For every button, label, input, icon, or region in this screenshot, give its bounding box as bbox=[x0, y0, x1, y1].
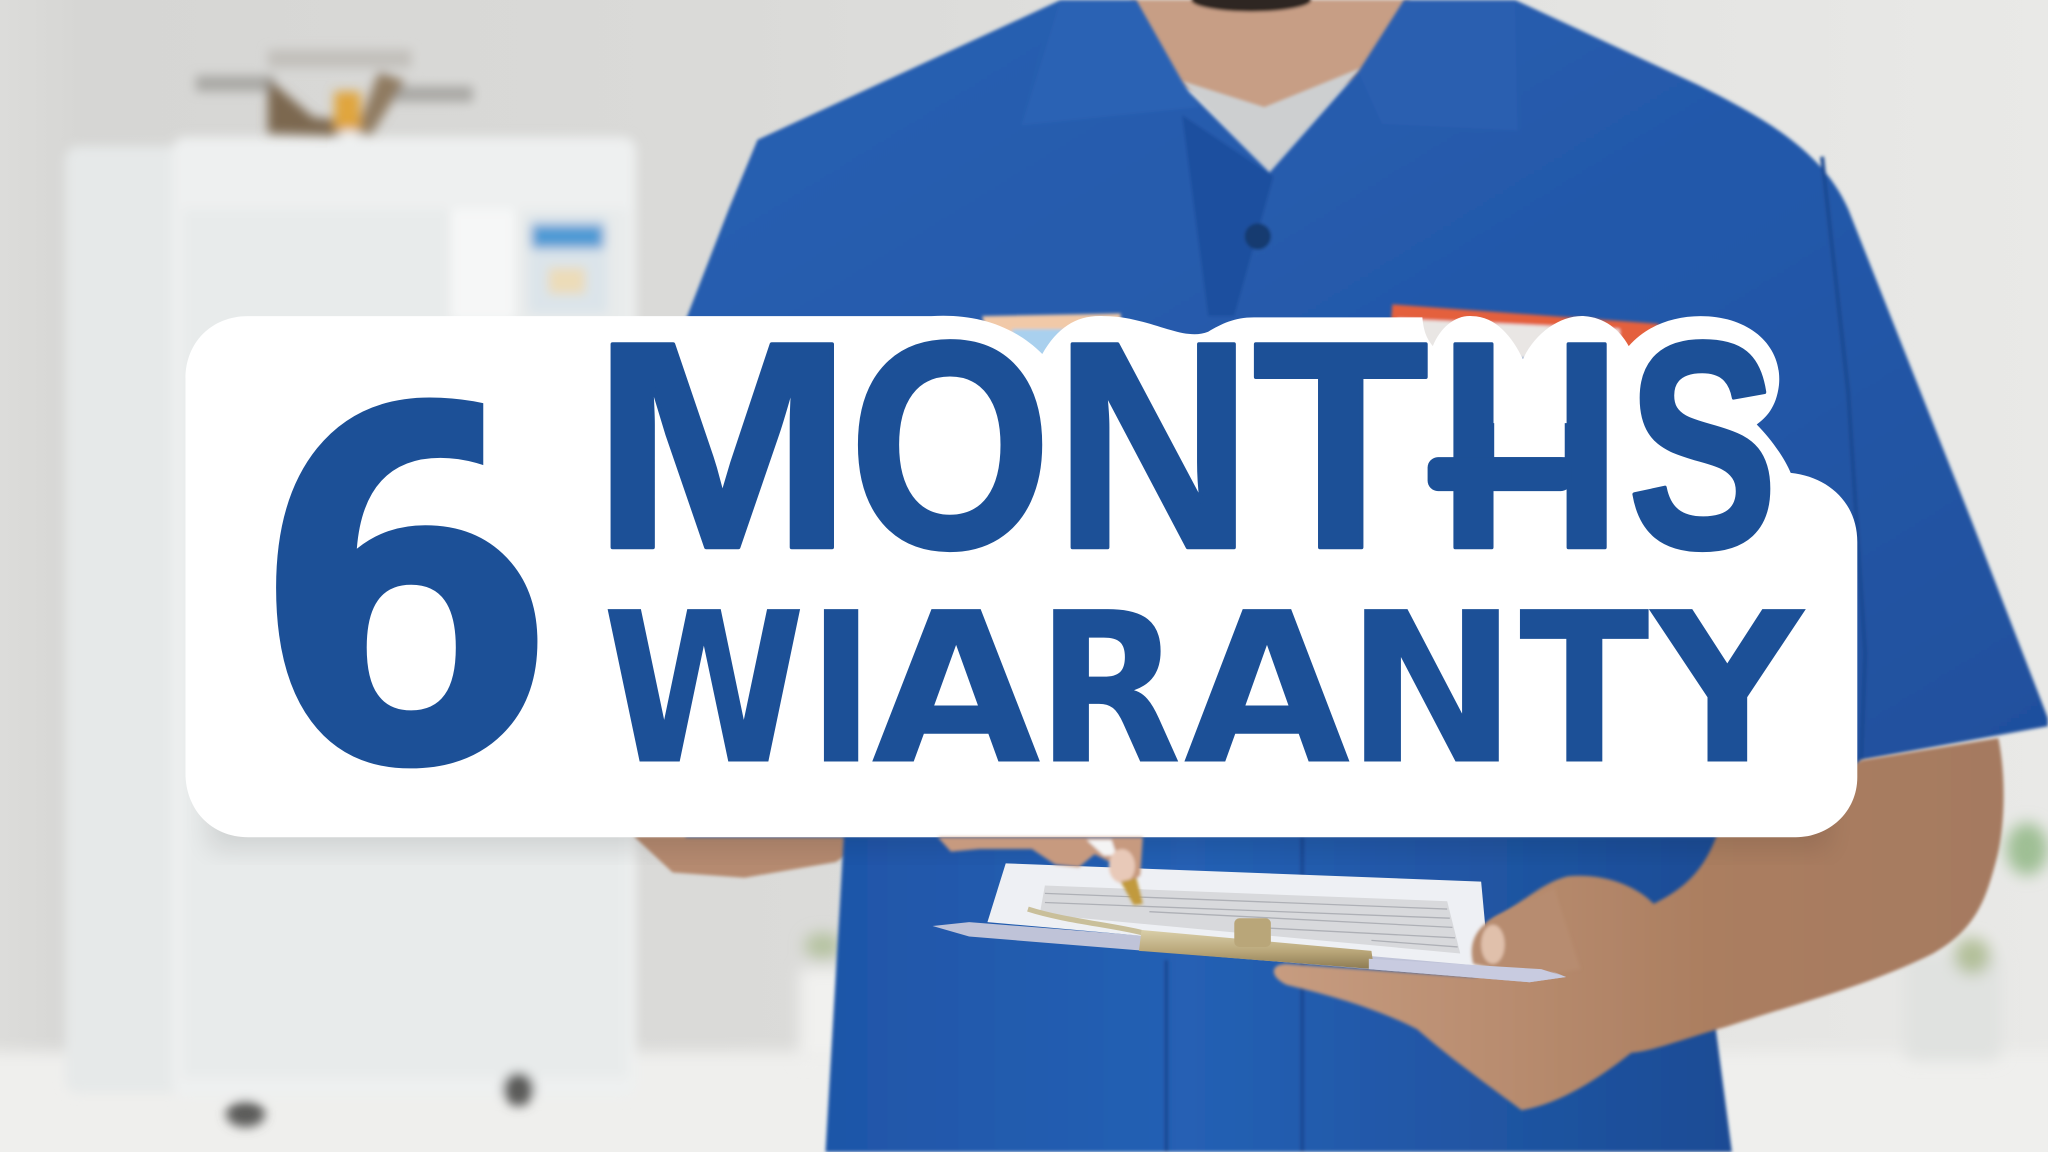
right collar bbox=[1358, 0, 1518, 131]
form table bbox=[1040, 886, 1460, 953]
left hand fingers with pen bbox=[938, 837, 1143, 905]
clipboard back bbox=[933, 922, 1566, 982]
headline WARRANTY as printed: W bbox=[602, 568, 806, 811]
technician right arm and hand bbox=[1274, 738, 2004, 1110]
heater display panel bbox=[529, 216, 607, 313]
headline MONTHS: M bbox=[592, 280, 853, 610]
banner shadow bbox=[209, 771, 1829, 849]
H crossbar trim bbox=[1494, 418, 1565, 457]
heater valves bbox=[196, 50, 473, 157]
water heater bbox=[65, 137, 636, 1127]
technician neck and beard bbox=[1130, 0, 1411, 118]
clip wire bbox=[1028, 909, 1142, 933]
paper sheet bbox=[987, 863, 1489, 967]
thumb nail bbox=[1481, 925, 1505, 964]
headline MONTHS: N bbox=[1054, 280, 1253, 610]
numeral 6 terminal trim bbox=[483, 372, 542, 503]
background plants and pots bbox=[799, 823, 2048, 1061]
torso seams bbox=[1165, 960, 1168, 1152]
torso bbox=[825, 837, 1732, 1152]
headline WARRANTY as printed: A bbox=[1183, 568, 1351, 811]
headline MONTHS: O bbox=[849, 280, 1051, 610]
sleeve seam bbox=[1822, 157, 1865, 760]
clipboard with form bbox=[933, 863, 1566, 982]
headline WARRANTY as printed: A bbox=[871, 568, 1041, 811]
headline WARRANTY as printed: I bbox=[807, 568, 875, 811]
H crossbar extension bbox=[1428, 457, 1571, 491]
pen nib bbox=[1121, 878, 1143, 905]
headline WARRANTY as printed: T bbox=[1519, 568, 1650, 811]
gold clip bbox=[1139, 930, 1374, 969]
left collar bbox=[1021, 0, 1199, 125]
technician blue shirt bbox=[686, 0, 2048, 1152]
headline MONTHS: S bbox=[1627, 280, 1778, 610]
technician grey undershirt bbox=[1182, 68, 1361, 172]
headline MONTHS: H bbox=[1438, 280, 1622, 610]
technician left sleeve arm bbox=[633, 836, 875, 878]
headline WARRANTY as printed: N bbox=[1345, 568, 1518, 811]
headline WARRANTY as printed: R bbox=[1036, 568, 1182, 811]
numeral 6: 6 bbox=[248, 305, 562, 877]
heater wheels bbox=[226, 1072, 534, 1127]
thumb over clipboard bbox=[1472, 888, 1580, 977]
headline WARRANTY as printed: Y bbox=[1648, 568, 1806, 811]
pocket badge labels bbox=[982, 304, 1659, 363]
white rounded banner bbox=[185, 316, 1857, 837]
headline MONTHS: T bbox=[1253, 280, 1429, 610]
clipboard corner over palm bbox=[1369, 959, 1566, 982]
floor bbox=[0, 1051, 2048, 1152]
shirt button bbox=[1245, 223, 1271, 249]
placket bbox=[1182, 115, 1273, 316]
